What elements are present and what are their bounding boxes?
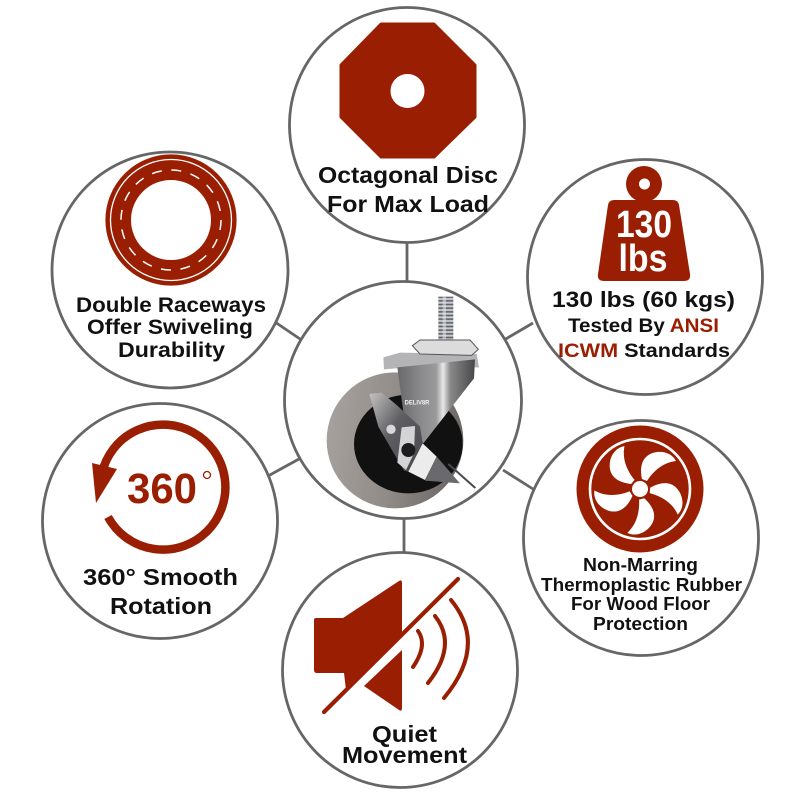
- panel: center caster: [284, 282, 522, 518]
- heading: 130 lbs (60 kgs): 130 lbs (60 kgs): [552, 287, 735, 312]
- heading: octagonal disc: For Max Load: [327, 191, 489, 217]
- heading: 360 smooth rotation: 360° Smooth: [83, 564, 238, 590]
- panel: quiet movement: [282, 552, 518, 788]
- icon: weight: 130: [616, 204, 672, 246]
- panel: octagonal disc: [290, 8, 524, 242]
- heading: non-marring thermoplastic rubber: Protection: [593, 614, 688, 634]
- icon: rotation arrow: 360: [127, 465, 197, 513]
- image: caster wheel: DELIV8R: [405, 400, 430, 406]
- heading: octagonal disc: Octagonal Disc: [318, 162, 498, 188]
- heading: non-marring thermoplastic rubber: Thermoplastic Rubber: [541, 575, 742, 595]
- connector lines: [268, 240, 533, 556]
- icon: fan wheel: [576, 426, 704, 552]
- heading: 360 smooth rotation: Rotation: [110, 593, 212, 619]
- heading: quiet movement: Quiet: [372, 721, 437, 747]
- icon: weight: [598, 166, 690, 281]
- heading: double raceways: Offer Swiveling: [87, 316, 253, 339]
- heading: double raceways: Durability: [118, 339, 225, 362]
- panel: non-marring rubber: [524, 420, 758, 656]
- panel: 360 rotation: [42, 404, 278, 638]
- icon: rotation arrow: [92, 425, 225, 550]
- heading: double raceways: Double Raceways: [76, 294, 266, 317]
- icon: weight: lbs: [618, 238, 668, 280]
- panel: 130 lbs load: [528, 160, 762, 394]
- heading: non-marring thermoplastic rubber: For Wood Floor: [571, 594, 710, 614]
- icon: muted speaker: [314, 579, 468, 712]
- text: ICWM standards: ICWM Standards: [558, 341, 730, 362]
- icon: raceway ring: [110, 160, 232, 280]
- text: tested by ANSI: Tested By ANSI: [568, 316, 719, 337]
- heading: non-marring thermoplastic rubber: Non-Marring: [583, 555, 698, 575]
- heading: quiet movement: Movement: [342, 742, 467, 768]
- icon: octagon disc: [341, 24, 475, 157]
- image: caster wheel: [327, 297, 479, 508]
- panel: double raceways: [52, 152, 288, 388]
